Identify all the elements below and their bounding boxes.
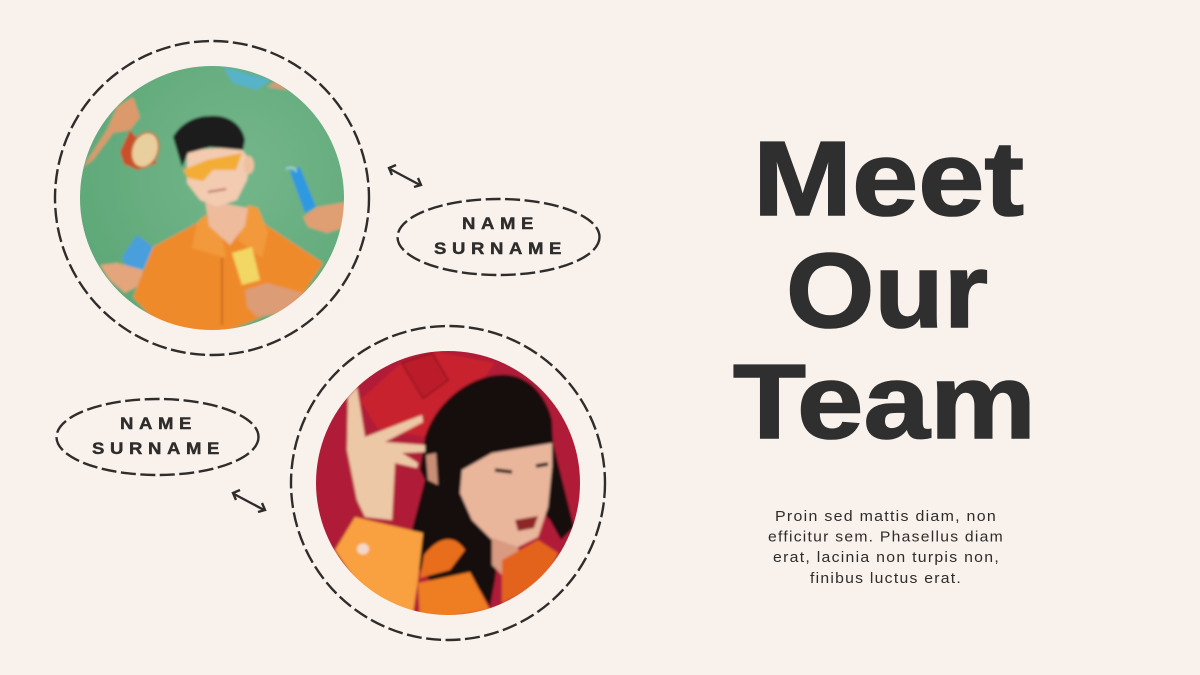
description: finibus luctus erat. bbox=[810, 570, 962, 587]
team slide bbox=[54, 40, 1030, 642]
name badge 2: NAME bbox=[120, 415, 197, 433]
photo: woman holding red bag on crimson bbox=[316, 351, 580, 615]
arrow: badge 1 to portrait 1 bbox=[389, 165, 421, 187]
member 2 portrait bbox=[291, 326, 605, 640]
title: Team bbox=[733, 343, 1036, 461]
name badge 1: SURNAME bbox=[434, 240, 567, 258]
name badge 1 bbox=[398, 199, 600, 275]
title: Our bbox=[786, 232, 988, 350]
description: efficitur sem. Phasellus diam bbox=[768, 528, 1004, 546]
arrow: badge 2 to portrait 2 bbox=[233, 490, 265, 512]
description bbox=[768, 508, 1004, 587]
member 1 portrait bbox=[55, 41, 369, 355]
name badge 2 bbox=[56, 399, 258, 475]
dashed ring 2 bbox=[291, 326, 605, 640]
name badge 1: NAME bbox=[462, 215, 539, 233]
title bbox=[733, 120, 1036, 461]
photo: man in orange shirt on green bbox=[80, 66, 344, 330]
description: Proin sed mattis diam, non bbox=[775, 508, 997, 525]
title: Meet bbox=[753, 120, 1024, 238]
dashed ring 1 bbox=[55, 41, 369, 355]
description: erat, lacinia non turpis non, bbox=[773, 549, 1000, 566]
name badge 2: SURNAME bbox=[92, 440, 225, 458]
